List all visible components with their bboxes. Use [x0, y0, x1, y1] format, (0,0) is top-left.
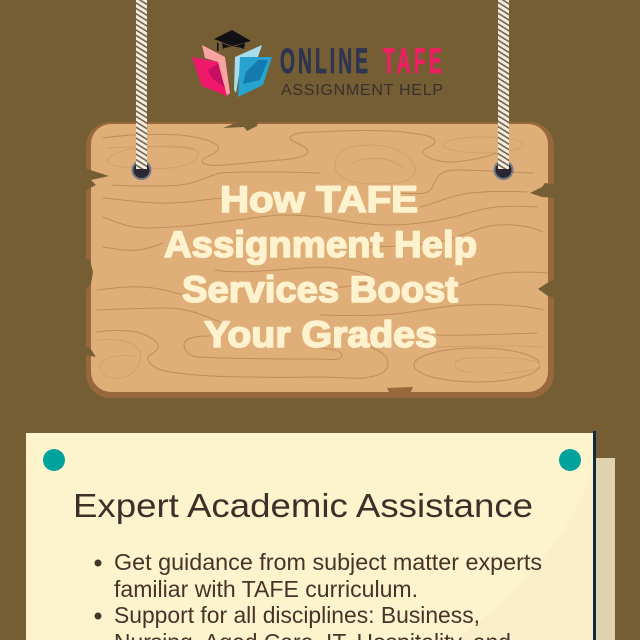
bullet list: Support for all disciplines: Business,: [114, 602, 480, 628]
icon: open book with graduation cap: [192, 30, 272, 97]
jagged notches in sign edge: [84, 122, 556, 394]
panel heading: Expert Academic Assistance: [73, 487, 533, 524]
title: How TAFE: [220, 179, 418, 220]
panel: expert academic assistance: [26, 431, 596, 640]
wood grain lines: [97, 130, 547, 382]
sign border: [86, 122, 554, 398]
back paper sheet: [595, 458, 615, 640]
title: Your Grades: [204, 314, 437, 355]
left eyelet: [132, 160, 152, 180]
bullet list: familiar with TAFE curriculum.: [114, 576, 418, 602]
paper sheet: [26, 433, 593, 640]
logo wordmark: online: ONLINE: [280, 41, 368, 80]
title: Assignment Help: [164, 224, 477, 265]
left rope strand: [136, 0, 147, 169]
paper dark edge: [593, 431, 596, 640]
right teal pin: [559, 449, 581, 471]
title: [164, 179, 477, 355]
title: Services Boost: [182, 269, 458, 310]
logo wordmark: tafe: TAFE: [383, 41, 442, 80]
paper fold shading: [455, 470, 593, 640]
right rope: [494, 0, 514, 180]
left teal pin: [43, 449, 65, 471]
bullet list: Get guidance from subject matter experts: [114, 549, 542, 575]
logo: [192, 30, 443, 99]
bullet list: [94, 549, 542, 640]
sign wood face: [91, 124, 548, 392]
hanging wooden sign: [84, 122, 556, 398]
right rope strand: [498, 0, 509, 169]
left rope: [132, 0, 152, 180]
right eyelet: [494, 160, 514, 180]
logo tagline: ASSIGNMENT HELP: [281, 82, 443, 99]
